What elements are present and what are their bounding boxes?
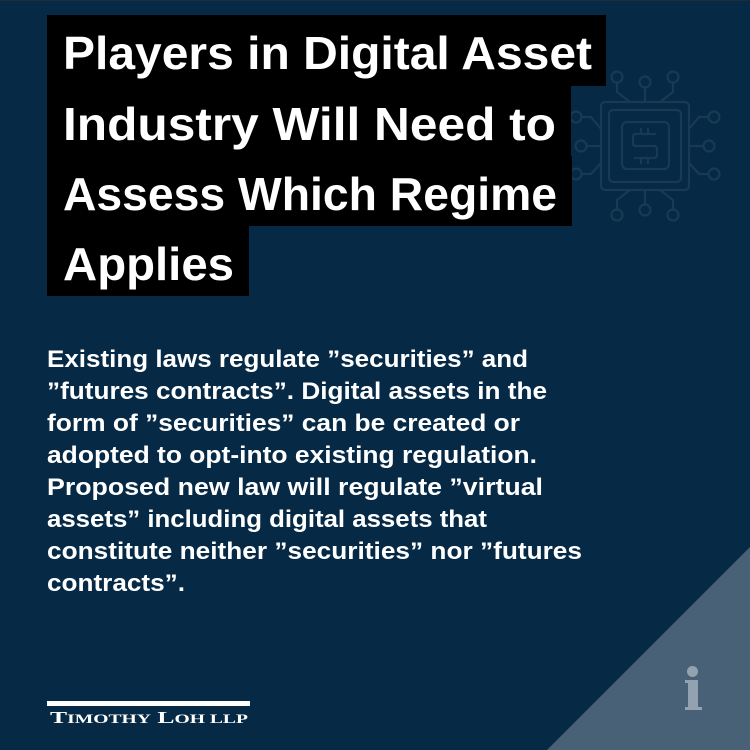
logo: Timothy Loh LLP — [47, 701, 250, 727]
body text: form of ”securities” can be created or — [47, 410, 520, 437]
corner triangle — [547, 547, 750, 750]
body text: contracts”. — [47, 570, 185, 597]
logo: Timothy Loh LLP: T IMOTHY L OH LLP — [50, 708, 248, 727]
icon: info — [685, 666, 702, 710]
title: Industry Will Need to — [63, 98, 556, 150]
title: Players in Digital Asset — [63, 27, 592, 79]
title: Assess Which Regime — [63, 168, 557, 220]
body text: constitute neither ”securities” nor ”futures — [47, 538, 582, 565]
body text: ”futures contracts”. Digital assets in the — [47, 378, 547, 405]
title — [47, 15, 606, 296]
body text: assets” including digital assets that — [47, 506, 487, 533]
icon: digital dollar chip — [570, 72, 720, 220]
body text: adopted to opt-into existing regulation. — [47, 442, 537, 469]
title: Applies — [63, 238, 234, 290]
body text — [47, 346, 582, 597]
body text: Existing laws regulate ”securities” and — [47, 346, 528, 373]
body text: Proposed new law will regulate ”virtual — [47, 474, 543, 501]
